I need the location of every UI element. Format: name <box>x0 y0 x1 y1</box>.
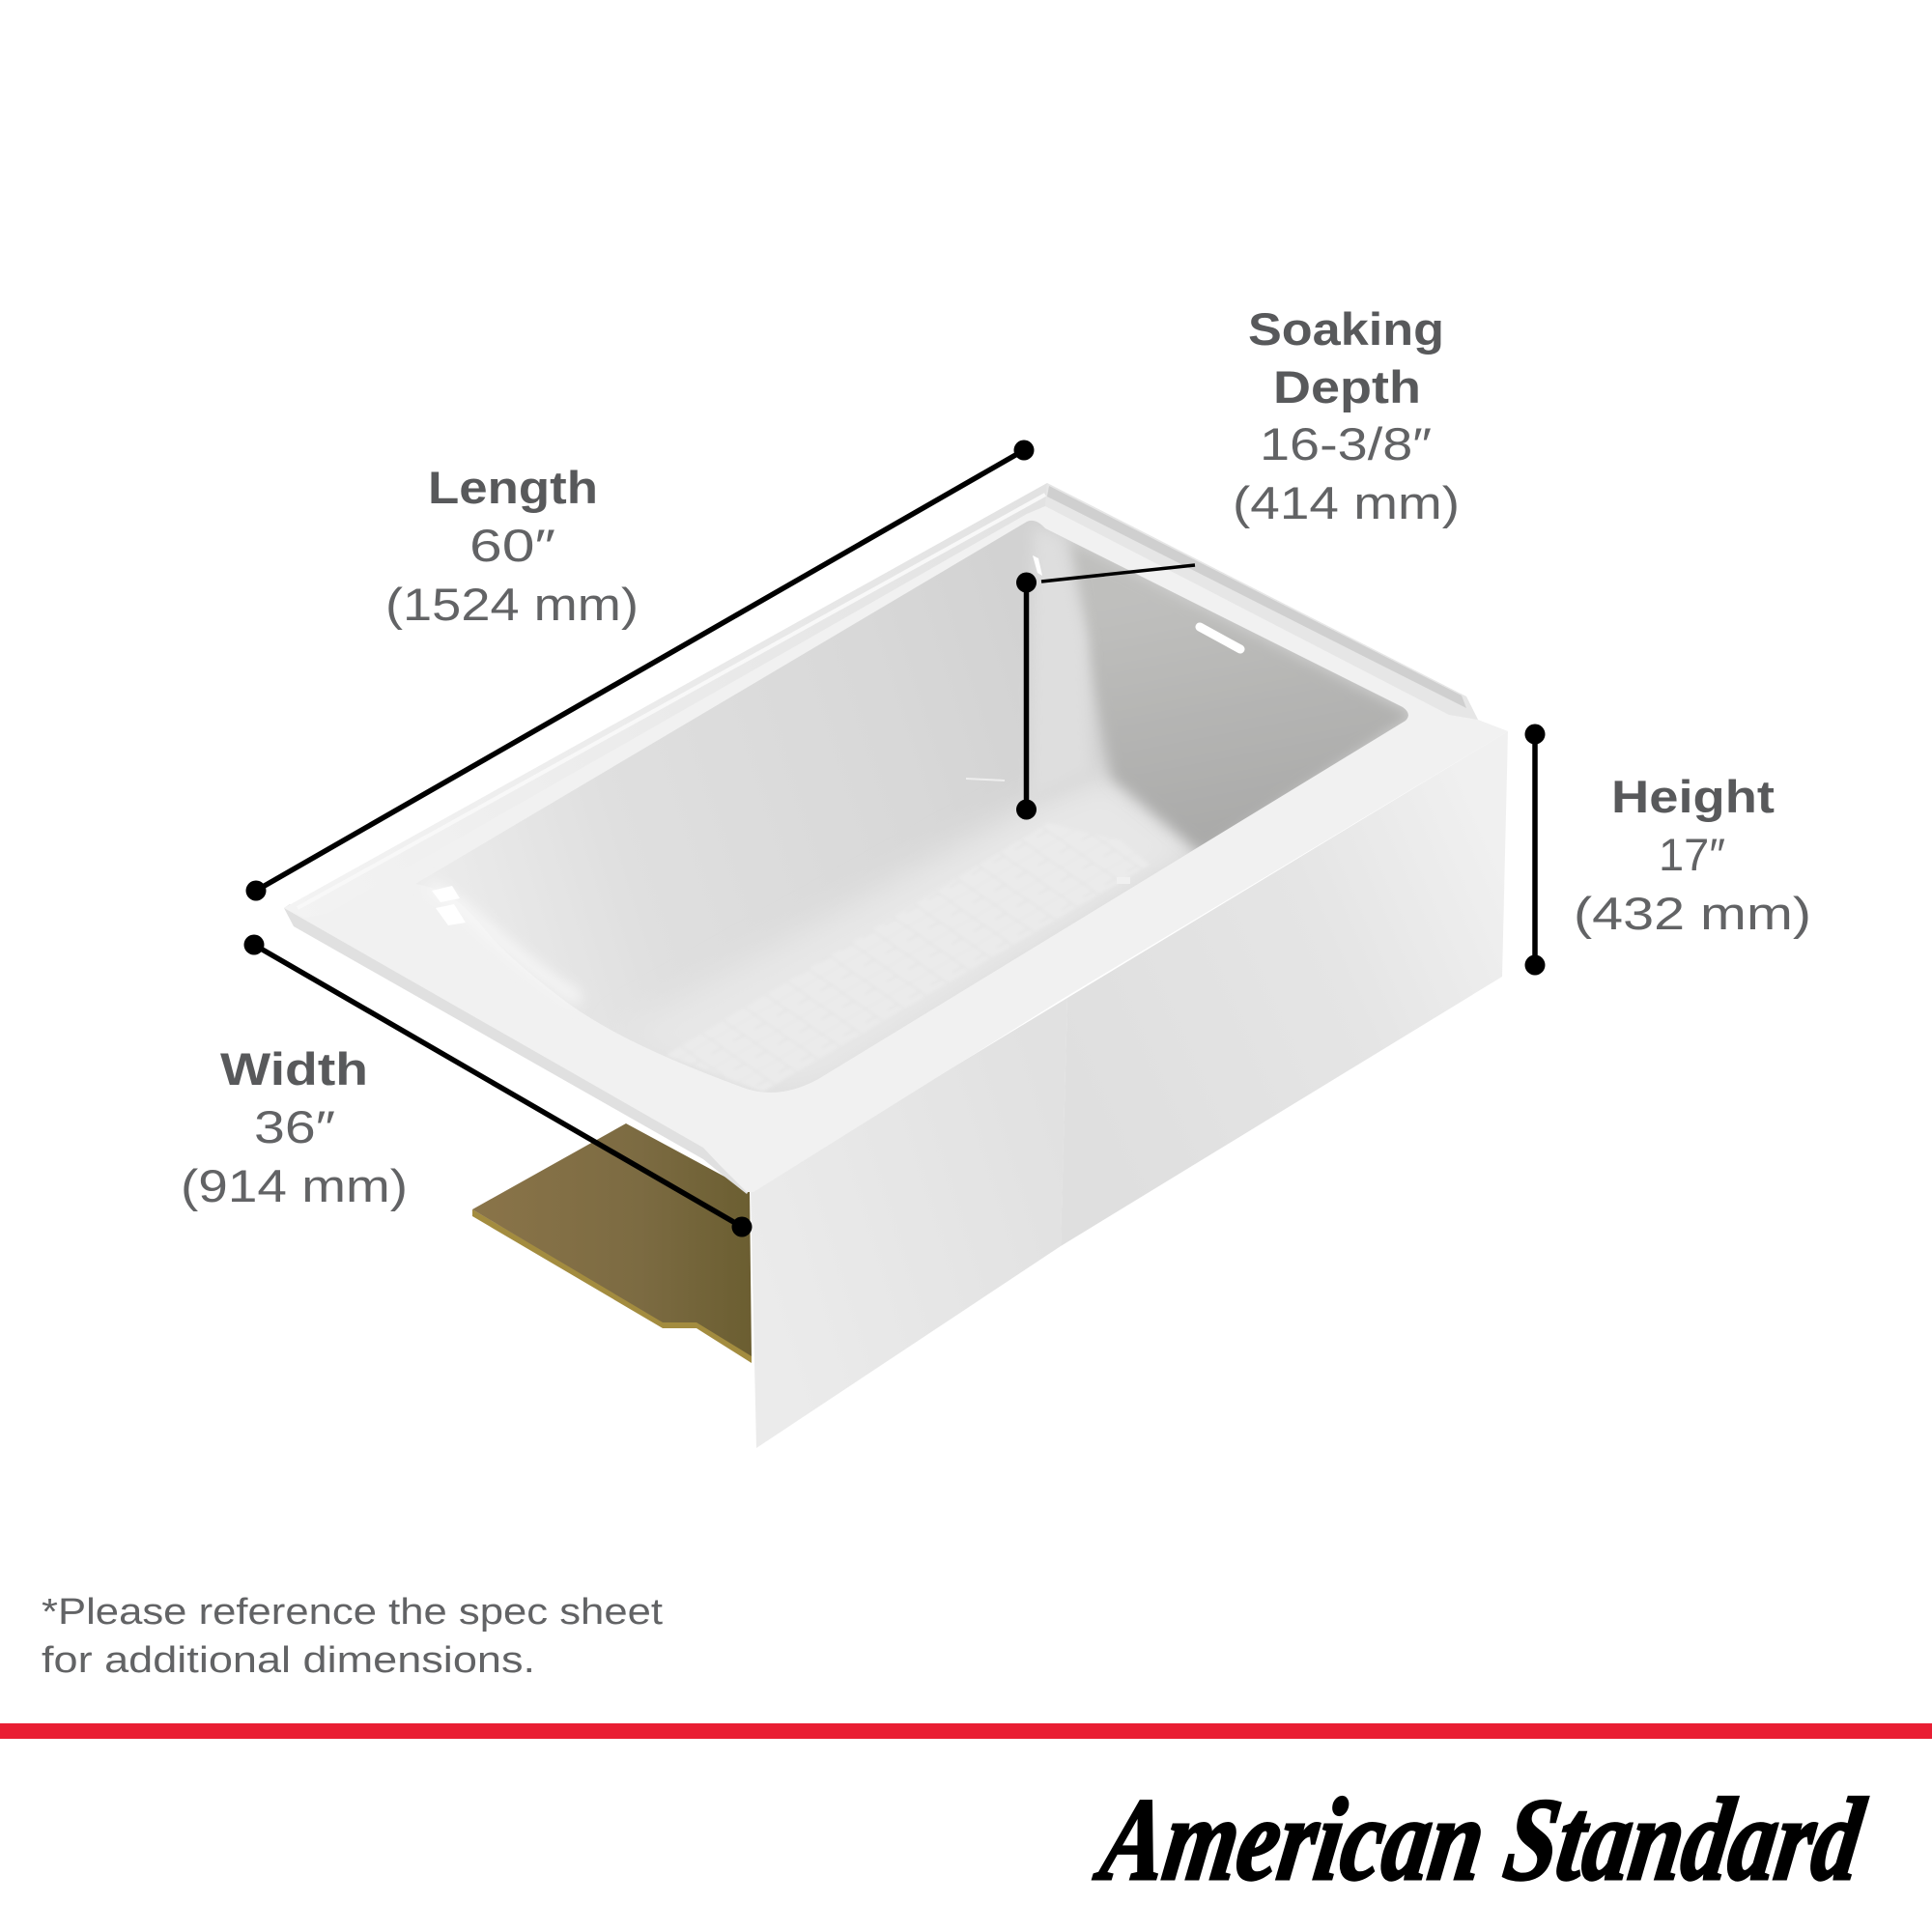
label: width: Width <box>220 1043 368 1094</box>
label: soaking depth: Depth <box>1273 361 1421 412</box>
label: height: Height <box>1611 771 1775 822</box>
label: soaking depth: 16-3/8″ <box>1260 418 1432 469</box>
label: soaking depth <box>1233 303 1460 528</box>
label: height: 17″ <box>1659 829 1725 880</box>
label: height <box>1574 771 1811 939</box>
label: width: (914 mm) <box>181 1160 408 1211</box>
footnote: *Please reference the spec sheet <box>42 1592 664 1633</box>
label: length: (1524 mm) <box>385 579 639 630</box>
overflow slot <box>1200 627 1240 649</box>
tub basin <box>415 521 1415 1093</box>
deck back ledge <box>284 483 1478 918</box>
label: length <box>385 462 639 630</box>
bathtub illustration <box>284 483 1508 1448</box>
label: soaking depth: (414 mm) <box>1233 477 1460 528</box>
corner highlight <box>1034 534 1092 781</box>
label: width: 36″ <box>254 1101 335 1152</box>
footnote <box>42 1592 664 1681</box>
dimension: height <box>1524 724 1546 976</box>
end wall <box>1070 541 1415 855</box>
apron front right panel <box>1061 731 1508 1246</box>
wall seam highlight <box>966 779 1005 781</box>
label: soaking depth: Soaking <box>1248 303 1444 355</box>
apron front left panel <box>751 998 1067 1448</box>
wall glint <box>1033 555 1042 576</box>
floor mat texture <box>762 1088 766 1089</box>
label: length: 60″ <box>469 520 555 571</box>
basin headrest highlight <box>430 887 580 1000</box>
dimension: length <box>245 440 1034 900</box>
dimension: width <box>243 935 752 1236</box>
dimension: soaking depth <box>1016 565 1195 819</box>
headrest glints <box>432 886 466 925</box>
drain glint <box>1117 877 1130 884</box>
label: width <box>181 1043 408 1211</box>
brass support board <box>472 1123 752 1363</box>
rim underside strip <box>284 904 753 1194</box>
red divider bar <box>0 1723 1932 1739</box>
label: length: Length <box>428 462 598 513</box>
tub deck <box>284 483 1508 1192</box>
footnote: for additional dimensions. <box>42 1640 535 1681</box>
label: height: (432 mm) <box>1574 888 1811 939</box>
basin floor <box>679 775 1191 1078</box>
